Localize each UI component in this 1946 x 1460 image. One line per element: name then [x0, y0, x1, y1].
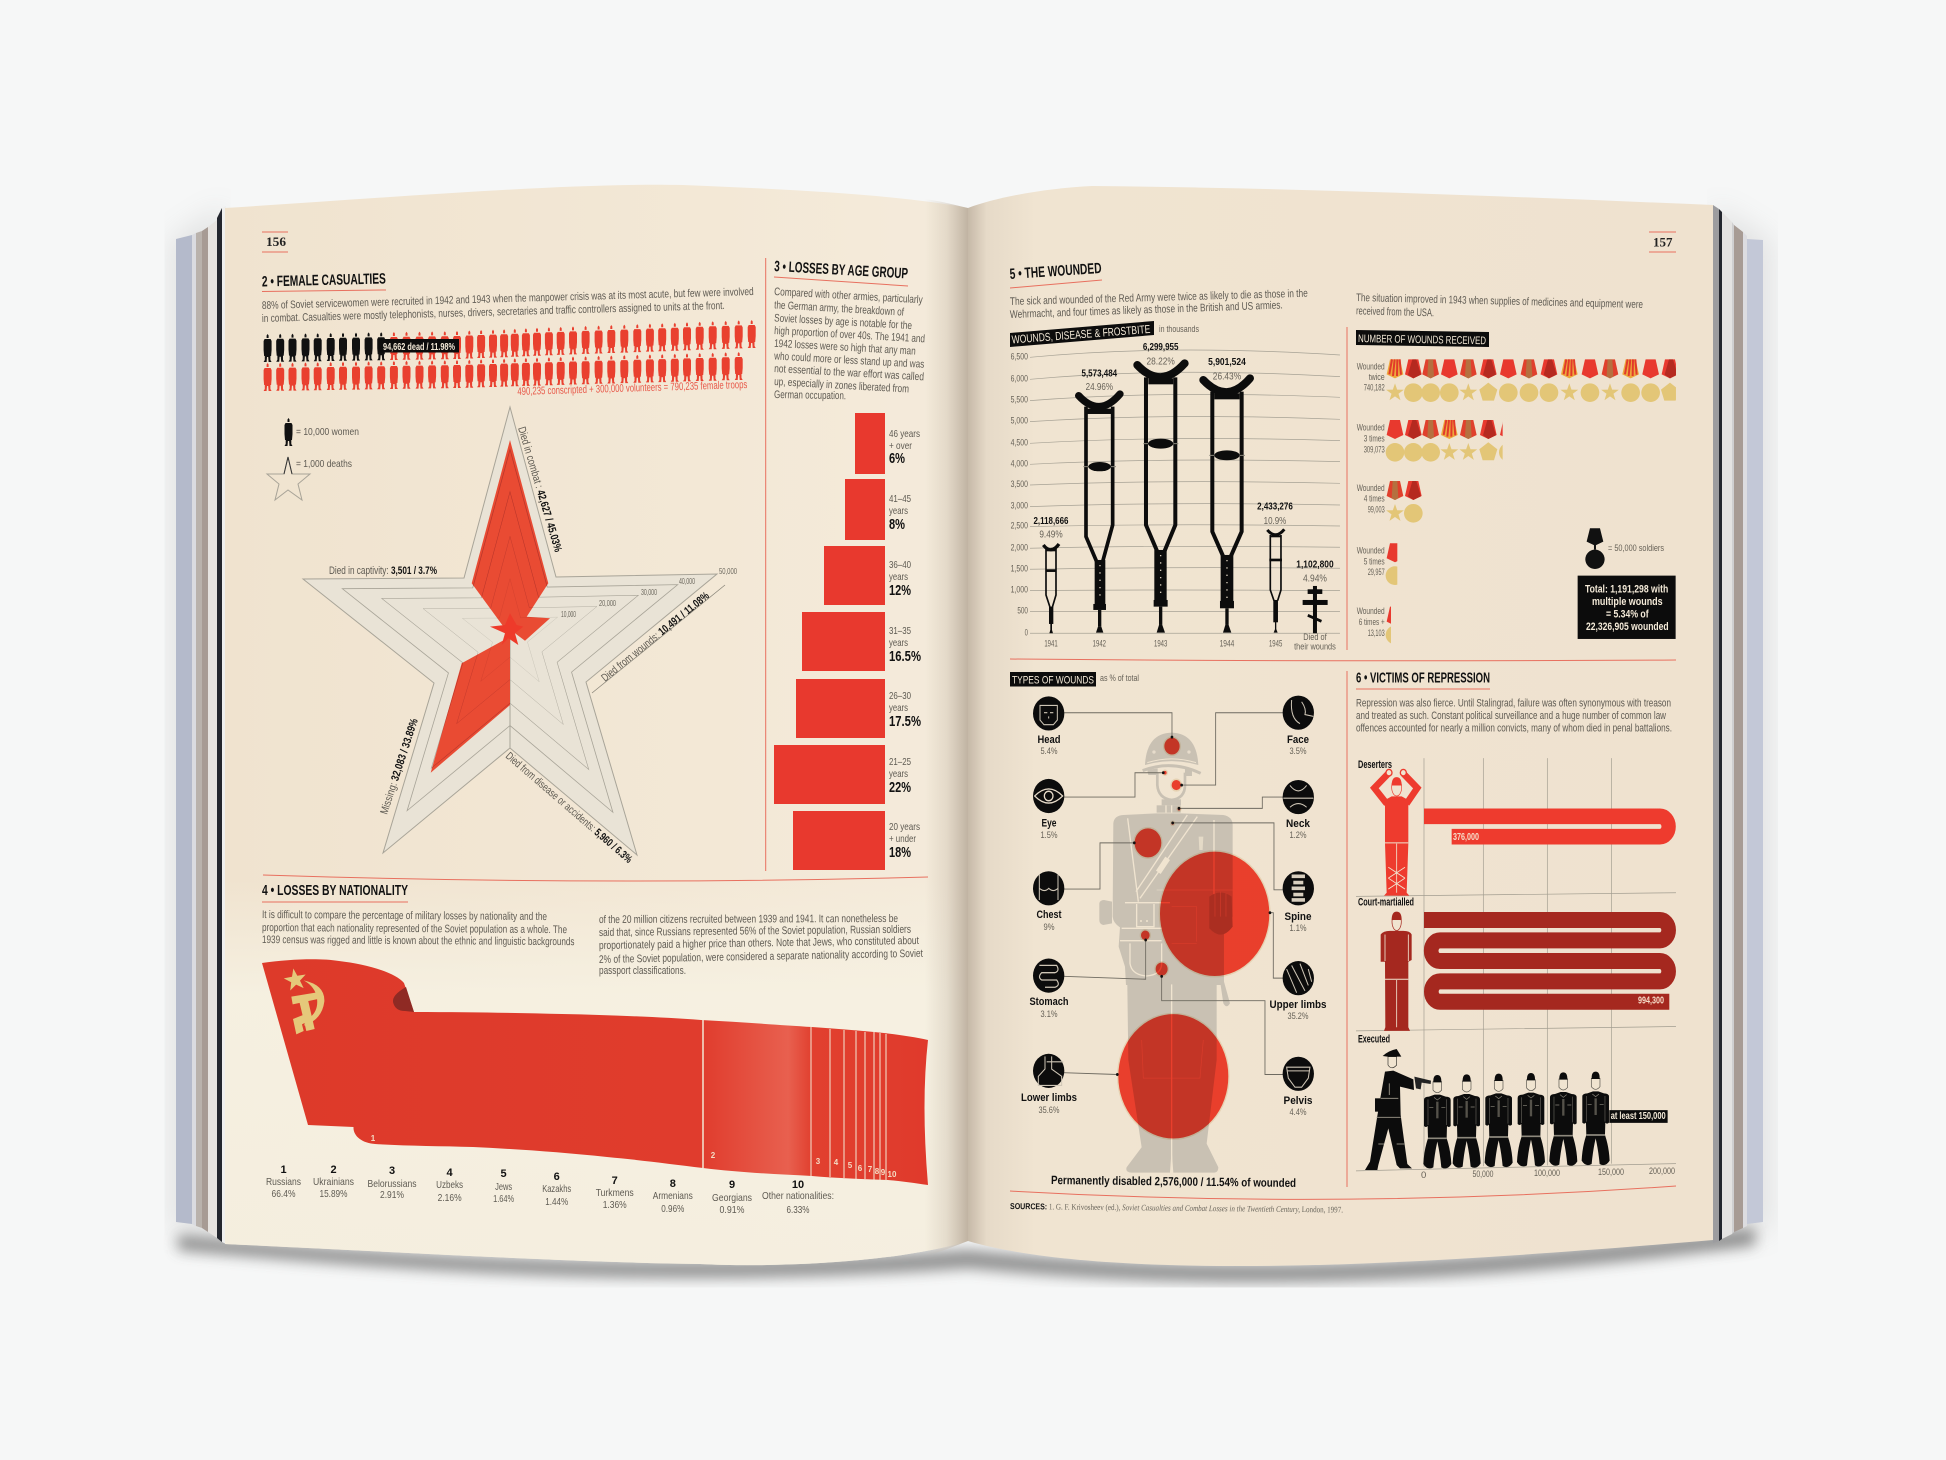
executed tag: [1609, 1110, 1668, 1123]
axis labels: 6,500: [1011, 351, 1028, 361]
flag chart: nationalities: 5: [848, 1161, 853, 1170]
star axis labels: 50,000: [719, 567, 737, 576]
flag chart: nationalities: 6: [858, 1164, 863, 1173]
row: wounded 3 times: [1386, 420, 1518, 462]
star radar chart: [303, 407, 737, 866]
wound labels: Lower limbs: [1021, 1092, 1077, 1104]
age group bar chart: 8%: [889, 517, 905, 533]
row: wounded 5 times: [1386, 543, 1398, 585]
star axis labels: 10,000: [561, 610, 576, 619]
age group bar chart: years: [889, 571, 908, 583]
nationality labels: [266, 1164, 834, 1216]
crutch percent labels: [1039, 356, 1327, 585]
icon: pelvis: [1283, 1057, 1314, 1091]
nationality labels: 15.89%: [320, 1188, 348, 1200]
section 4 text column 1: It is difficult to compare the percentage of military losses by nationality and the: [262, 909, 547, 923]
age group bar chart: 17.5%: [889, 714, 921, 730]
nationality labels: 0.91%: [720, 1204, 744, 1216]
age group bar chart: 18%: [889, 845, 911, 861]
tag: number of wounds received: NUMBER OF WOUNDS RECEIVED: [1358, 333, 1486, 347]
chart tag: wounds, disease and frostbite: in thousands: [1159, 324, 1199, 335]
crutch percent labels: 4.94%: [1303, 574, 1327, 585]
wound labels: 5.4%: [1040, 746, 1058, 757]
flag chart: nationalities: [262, 959, 928, 1185]
wound labels: 3.1%: [1040, 1009, 1058, 1020]
connector end dots: [1116, 736, 1271, 1076]
callout: dead tag: 94,662 dead / 11.98%: [383, 342, 455, 353]
medal row labels: 29,957: [1368, 567, 1385, 578]
nationality labels: 3: [389, 1165, 395, 1177]
icon: neck: [1283, 780, 1314, 814]
wound labels: Chest: [1036, 909, 1062, 921]
section 4 text column 1: 1939 census was rigged and little is known about the ethnic and linguistic backgrounds: [262, 934, 575, 948]
chart gridlines: [1030, 350, 1340, 633]
nationality labels: Belorussians: [368, 1178, 416, 1190]
figures: condemned soldiers: [1423, 1072, 1610, 1168]
section 6 heading: 6 • VICTIMS OF REPRESSION: [1356, 670, 1490, 686]
tag: types of wounds: TYPES OF WOUNDS: [1012, 674, 1094, 686]
medal row labels: 99,003: [1368, 505, 1385, 516]
section 4 text column 1: [262, 909, 575, 948]
section 4 text column 2: 2% of the Soviet population, were considered a separate nationality according to Soviet: [599, 948, 923, 966]
flag chart: nationalities: 8: [875, 1167, 880, 1176]
year labels: their wounds: [1294, 641, 1336, 651]
pictogram: female troops: [264, 320, 756, 391]
wound labels: 1.2%: [1290, 830, 1307, 841]
icon: spine: [1283, 871, 1314, 905]
nationality labels: 1.64%: [493, 1193, 514, 1205]
chart tag: wounds, disease and frostbite: WOUNDS, DISEASE & FROSTBITE: [1011, 324, 1151, 346]
wound labels: Spine: [1284, 911, 1312, 923]
axis labels: 4,000: [1011, 458, 1028, 468]
bar: deserters: [1424, 816, 1669, 837]
section 4 text column 2: proportionately paid a higher price than others. Note that Jews, who constituted about: [599, 935, 919, 952]
star axis labels: [561, 567, 737, 619]
wound labels: 1.5%: [1040, 830, 1058, 841]
wound labels: Pelvis: [1284, 1095, 1312, 1107]
nationality labels: Turkmens: [596, 1187, 634, 1199]
age group bar chart: 16.5%: [889, 649, 921, 665]
crutch percent labels: 28.22%: [1146, 356, 1175, 367]
section 3 text: [773, 286, 925, 402]
age group bar chart: 36–40: [889, 559, 911, 571]
section 5 heading: [1009, 260, 1102, 288]
axis labels: 500: [1017, 606, 1028, 616]
section 3 heading: [774, 258, 909, 286]
permanently disabled note: Permanently disabled 2,576,000 / 11.54% of wounded: [1051, 1173, 1296, 1190]
grid: [1356, 758, 1676, 1171]
bar: court-martialled: [1424, 920, 1669, 1002]
crutch value labels: [1033, 342, 1334, 570]
figure: court-martialled: [1381, 912, 1412, 1031]
section 4 text column 2: [599, 913, 923, 977]
wound labels: Stomach: [1030, 996, 1069, 1008]
age group bar chart: 22%: [889, 780, 911, 796]
age group bar chart: 6%: [889, 451, 905, 467]
left page: [225, 185, 968, 1265]
flag chart: nationalities: 2: [711, 1151, 716, 1160]
axis labels: 5,000: [1011, 416, 1028, 426]
crutch percent labels: 26.43%: [1213, 371, 1241, 382]
nationality labels: 0.96%: [661, 1203, 684, 1215]
crutch 1944: [1203, 378, 1250, 633]
right page: [968, 186, 1713, 1266]
medal row labels: Wounded: [1357, 361, 1385, 372]
callout: dead tag: [379, 339, 459, 353]
cross: died of wounds: [1303, 586, 1328, 633]
total box: multiple wounds: [1592, 596, 1663, 608]
year labels: [1044, 632, 1336, 651]
red data shape: [431, 440, 550, 773]
icon: upper limbs: [1283, 961, 1314, 995]
bottom divider right page: [1010, 1186, 1676, 1199]
nationality labels: 10: [792, 1179, 804, 1191]
axis labels: 4,500: [1011, 437, 1028, 447]
medal row labels: [1357, 361, 1385, 639]
wound labels: 9%: [1044, 922, 1055, 933]
nationality labels: 4: [447, 1167, 454, 1179]
wound circles: [1118, 737, 1270, 1139]
section 6 text: offences accounted for nearly a million convicts, many of whom died in penal battalions.: [1356, 723, 1672, 735]
axis labels: 0: [1025, 627, 1028, 637]
crutch 1943: [1137, 363, 1185, 633]
age group bar chart: 20 years: [889, 821, 920, 833]
soldier upper body: [1099, 733, 1262, 1006]
section 2 intro text: [262, 286, 754, 325]
section 3 text: 1942 losses were so high that any man: [774, 338, 916, 358]
section 3 heading: 3 • LOSSES BY AGE GROUP: [774, 258, 909, 282]
year labels: 1945: [1269, 639, 1282, 649]
section 4 heading: 4 • LOSSES BY NATIONALITY: [262, 882, 408, 899]
year labels: Died of: [1303, 632, 1327, 642]
tag: number of wounds received: [1356, 330, 1489, 347]
axis labels: 6,000: [1011, 373, 1028, 383]
repression labels: [1358, 759, 1666, 1122]
nationality labels: Other nationalities:: [762, 1190, 834, 1202]
repression axis labels: 100,000: [1534, 1168, 1560, 1179]
year labels: 1944: [1220, 639, 1234, 649]
icon: stomach: [1033, 959, 1064, 993]
legend: star and figure: = 10,000 women: [296, 426, 359, 438]
wound labels: Eye: [1042, 818, 1056, 830]
nationality labels: Ukrainians: [313, 1176, 354, 1188]
nationality labels: 2.91%: [380, 1189, 404, 1201]
crutch 1945: [1267, 529, 1284, 633]
connectors: [1063, 713, 1283, 1075]
star axis labels: 20,000: [599, 599, 616, 608]
section 3 text: German occupation.: [774, 389, 846, 402]
icon: face: [1283, 696, 1314, 730]
nationality labels: 6: [554, 1171, 560, 1183]
repression axis labels: 200,000: [1649, 1166, 1675, 1177]
soldier legs: [1126, 984, 1218, 1173]
age group bar chart: [774, 413, 921, 870]
nationality labels: Uzbeks: [436, 1179, 463, 1191]
repression axis labels: 0: [1421, 1170, 1426, 1181]
medal row labels: 6 times +: [1359, 617, 1385, 628]
flag fold: [393, 987, 414, 1012]
left page edge stack: [176, 206, 226, 1244]
medal row labels: twice: [1369, 372, 1385, 383]
section 2 heading: [262, 270, 386, 292]
star category labels: Died from wounds: 10,491 / 11.08%: [599, 590, 712, 684]
section 3 text: high proportion of over 40s. The 1941 and: [774, 325, 925, 345]
crutch value labels: 5,573,484: [1081, 369, 1118, 380]
nationality labels: 2: [330, 1164, 337, 1176]
year labels: 1943: [1154, 639, 1167, 649]
axis labels: 5,500: [1011, 395, 1028, 405]
section 6 text: and treated as such. Constant political surveillance and a huge number of common law: [1356, 710, 1666, 722]
book shadow: [170, 205, 1772, 1282]
star axis labels: 30,000: [641, 588, 657, 597]
tag: types of wounds: as % of total: [1100, 673, 1139, 684]
repression axis labels: 150,000: [1598, 1167, 1624, 1178]
medal row labels: 4 times: [1364, 494, 1385, 505]
section 3 text: who could more or less stand up and was: [773, 350, 925, 371]
age group bar chart: + over: [889, 440, 912, 452]
section 5 text: [1010, 288, 1308, 321]
medal row labels: 13,103: [1368, 628, 1385, 639]
star category labels: [329, 425, 725, 866]
firing squad figures: [1365, 1049, 1610, 1170]
nationality labels: 1.44%: [545, 1196, 568, 1208]
axis labels: [1011, 351, 1028, 637]
wound labels: 1.1%: [1290, 923, 1307, 934]
nationality labels: 1: [280, 1164, 287, 1176]
crutch chart: [1011, 342, 1340, 651]
section 6 text: [1356, 698, 1672, 735]
medals pictogram: [1386, 359, 1679, 644]
star category labels: Died from disease or accidents: 5,960 / 6.3%: [503, 750, 634, 866]
crutch percent labels: 9.49%: [1039, 529, 1063, 540]
page number 156: 156: [266, 234, 287, 249]
section 3 divider: [765, 258, 767, 871]
axis labels: 3,000: [1011, 501, 1028, 511]
legend: star and figure: [267, 418, 359, 500]
repression labels: Deserters: [1358, 759, 1392, 771]
age group bar chart: 46 years: [889, 428, 920, 440]
crutch value labels: 5,901,524: [1208, 357, 1246, 368]
flag chart: nationalities: 3: [816, 1157, 821, 1166]
wound diagram: [1033, 696, 1314, 1173]
page number 156: [262, 232, 288, 252]
flag chart: nationalities: 1: [371, 1134, 376, 1143]
medal row labels: 5 times: [1364, 556, 1385, 567]
section 2 heading: 2 • FEMALE CASUALTIES: [262, 270, 386, 290]
repression labels: Executed: [1358, 1034, 1390, 1046]
total box: 22,326,905 wounded: [1586, 621, 1669, 633]
year labels: 1942: [1093, 639, 1106, 649]
repression labels: 376,000: [1453, 832, 1479, 843]
icon: lower limbs: [1033, 1054, 1064, 1088]
nationality labels: Georgians: [712, 1192, 752, 1204]
nationality labels: 66.4%: [272, 1188, 296, 1200]
crutch 1942: [1079, 394, 1120, 633]
flag chart: nationalities: 10: [888, 1170, 897, 1179]
wound labels: Head: [1038, 734, 1060, 746]
legend: star and figure: = 1,000 deaths: [296, 458, 352, 470]
crutch 1941: [1043, 544, 1059, 633]
section 5 text: The sick and wounded of the Red Army were twice as likely to die as those in the: [1010, 288, 1308, 308]
nationality labels: 6.33%: [786, 1204, 810, 1216]
nationality labels: 8: [670, 1178, 676, 1190]
section 3 text: Soviet losses by age is notable for the: [774, 312, 912, 332]
section 3 text: not essential to the war effort was called: [774, 363, 924, 383]
nationality labels: Armenians: [653, 1190, 693, 1202]
wound labels: Face: [1287, 734, 1309, 746]
repression labels: Court-martialled: [1358, 896, 1414, 908]
medal row labels: 309,073: [1364, 444, 1385, 455]
repression axis labels: 50,000: [1472, 1169, 1494, 1180]
page number 157: 157: [1653, 234, 1673, 250]
section 3 text: up, especially in zones liberated from: [774, 376, 909, 396]
black medal legend: [1585, 528, 1605, 569]
flag chart: nationalities: 9: [881, 1168, 886, 1177]
section 5 heading: 5 • THE WOUNDED: [1009, 260, 1102, 283]
wound labels: 35.2%: [1288, 1011, 1309, 1022]
crutch percent labels: 24.96%: [1086, 382, 1113, 393]
medal row labels: Wounded: [1357, 606, 1385, 617]
sources: SOURCES: 1. G. F. Krivosheev (ed.), Soviet Casualties and Combat Losses in the Twentieth Century, London, 1997.: [1010, 1201, 1343, 1214]
axis labels: 2,000: [1011, 542, 1028, 552]
nationality labels: 5: [501, 1168, 507, 1180]
hammer and sickle: [284, 968, 324, 1034]
year labels: 1941: [1044, 639, 1058, 649]
repression labels: at least 150,000: [1611, 1111, 1666, 1122]
crutch value labels: 2,433,276: [1257, 501, 1293, 512]
crutch value labels: 6,299,955: [1143, 342, 1179, 353]
repression labels: 994,300: [1638, 996, 1664, 1007]
section 4 divider: [263, 875, 928, 881]
figure: officer: [1365, 1049, 1431, 1170]
star category labels: Died in captivity: 3,501 / 3.7%: [329, 565, 437, 577]
axis labels: 3,500: [1011, 479, 1028, 489]
section 4 text column 2: passport classifications.: [599, 965, 686, 977]
section dividers right page: [1010, 327, 1676, 1187]
age group bar chart: 21–25: [889, 756, 911, 768]
nationality labels: Kazakhs: [542, 1183, 571, 1195]
total box: = 5.34% of: [1606, 608, 1649, 620]
icon: head: [1033, 696, 1064, 731]
section 6 heading: [1356, 670, 1490, 689]
crutch value labels: 1,102,800: [1296, 559, 1334, 570]
section 5 text: Wehrmacht, and four times as likely as those in the British and US armies.: [1010, 299, 1283, 321]
section 4 text column 1: proportion that each nationality represented of the Soviet population as a whole. The: [262, 922, 567, 936]
age group bar chart: years: [889, 637, 908, 649]
total box: [1578, 576, 1676, 639]
wound labels: Upper limbs: [1270, 999, 1326, 1011]
axis labels: 2,500: [1011, 521, 1028, 531]
row: wounded 4 times: [1386, 481, 1423, 523]
age group bar chart: years: [889, 505, 908, 517]
age group bar chart: 41–45: [889, 493, 911, 505]
nationality labels: 9: [729, 1179, 735, 1191]
repression axis labels: [1421, 1166, 1675, 1181]
total box: Total: 1,191,298 with: [1585, 584, 1669, 596]
row: wounded 6 times or more: [1386, 606, 1391, 644]
flag chart: nationalities: 4: [834, 1158, 839, 1167]
wound labels: 4.4%: [1290, 1107, 1307, 1118]
star axis labels: 40,000: [679, 577, 695, 586]
star category labels: Died in combat : 42,627 / 45.03%: [515, 425, 564, 554]
right page edge stack: [1713, 205, 1763, 1243]
page number 157: [1649, 232, 1676, 252]
situation text: received from the USA.: [1356, 305, 1434, 319]
medal row labels: 740,182: [1364, 383, 1385, 394]
section 2 intro text: 88% of Soviet servicewomen were recruited in 1942 and 1943 when the manpower crisis was at its most acute, but few were involved: [262, 286, 754, 312]
axis labels: 1,000: [1011, 585, 1028, 595]
age group bar chart: 26–30: [889, 690, 911, 702]
axis labels: 1,500: [1011, 563, 1028, 573]
wound labels: 3.5%: [1290, 746, 1307, 757]
nationality labels: Russians: [266, 1176, 301, 1188]
wound labels: [1021, 734, 1326, 1118]
age group bar chart: years: [889, 768, 908, 780]
medal row labels: 3 times: [1364, 434, 1385, 445]
medal legend label: = 50,000 soldiers: [1608, 543, 1664, 554]
icon: eye: [1033, 779, 1064, 813]
medal row labels: Wounded: [1357, 545, 1385, 556]
section 6 text: Repression was also fierce. Until Stalingrad, failure was often synonymous with treason: [1356, 698, 1671, 710]
age group bar chart: + under: [889, 833, 916, 845]
nationality labels: Jews: [495, 1181, 512, 1193]
age group bar chart: 12%: [889, 583, 911, 599]
wound labels: Neck: [1286, 818, 1311, 830]
age group bar chart: years: [889, 702, 908, 714]
situation text: The situation improved in 1943 when supplies of medicines and equipment were: [1356, 292, 1643, 311]
crutch value labels: 2,118,666: [1033, 516, 1069, 527]
wound labels: 35.6%: [1038, 1105, 1060, 1116]
medal row labels: Wounded: [1357, 423, 1385, 434]
icon: chest: [1033, 871, 1064, 905]
nationality labels: 2.16%: [438, 1192, 462, 1204]
figure: deserter: [1374, 769, 1417, 896]
age group bar chart: 31–35: [889, 625, 911, 637]
tag: types of wounds: [1010, 672, 1139, 686]
star category labels: Missing: 32,083 / 33.89%: [378, 717, 421, 816]
total troops label: 490,235 conscripted + 300,000 volunteers = 790,235 female troops: [517, 379, 748, 398]
section 4 text column 2: of the 20 million citizens recruited between 1939 and 1941. It can nonetheless be: [599, 913, 898, 926]
section 3 text: Compared with other armies, particularly: [774, 286, 923, 306]
section 4 text column 2: said that, since Russians represented 56% of the Soviet population, Russian soldiers: [599, 924, 911, 939]
row: wounded twice: [1386, 359, 1679, 402]
situation text: [1356, 292, 1643, 319]
repression chart: [1356, 758, 1676, 1171]
section 3 text: the German army, the breakdown of: [774, 299, 905, 319]
flag chart: nationalities: 7: [868, 1165, 873, 1174]
section 2 intro text: in combat. Casualties were mostly telephonists, nurses, drivers, secretaries and traffic controllers assigned to units at the front.: [262, 300, 725, 325]
nationality labels: 7: [612, 1175, 618, 1187]
nationality labels: 1.36%: [603, 1199, 627, 1211]
crutch percent labels: 10.9%: [1264, 516, 1287, 527]
medal row labels: Wounded: [1357, 483, 1385, 494]
